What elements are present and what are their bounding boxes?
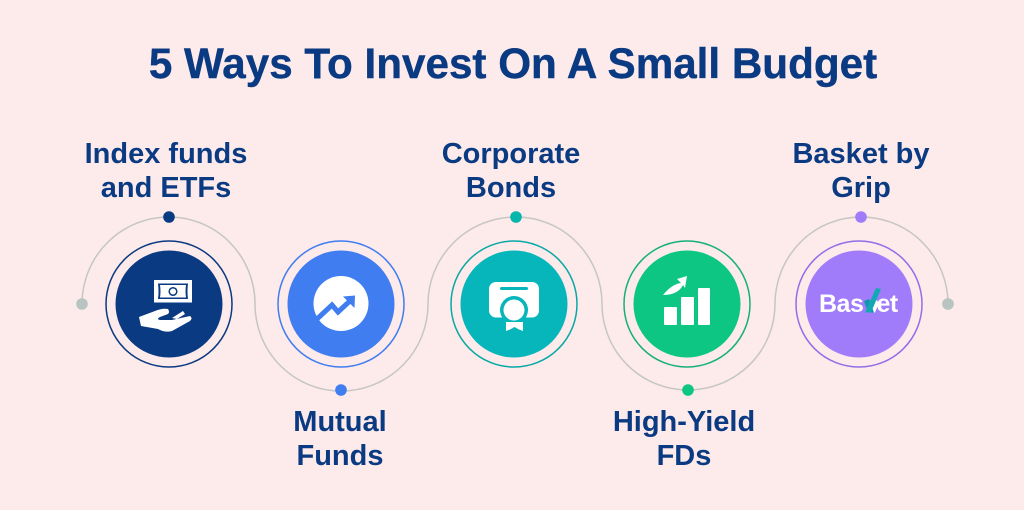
end dot [942,298,954,310]
label: High-Yield FDs [613,406,755,472]
connector line [82,217,948,391]
label: Basket by Grip: Grip [831,172,891,204]
icon: Basket logo: et [876,290,899,318]
icon: hand with banknote [106,241,232,367]
node dot 1 [163,211,175,223]
icon: growth arrow badge [278,241,404,367]
node dot 4 [682,384,694,396]
node dot 2 [335,384,347,396]
label: High-Yield FDs: High-Yield [613,406,755,438]
label: Index funds and ETFs: Index funds [85,138,247,170]
label: High-Yield FDs: FDs [657,440,711,472]
icon: bar chart with arrow [624,241,750,367]
label: Mutual Funds [293,406,387,472]
label: Index funds and ETFs: and ETFs [101,172,231,204]
start dot [76,298,88,310]
title: 5 Ways To Invest On A Small Budget [149,40,877,87]
label: Mutual Funds: Funds [296,440,384,472]
label: Corporate Bonds: Bonds [466,172,556,204]
label: Corporate Bonds [442,138,580,204]
icon: Basket logo [796,241,922,367]
label: Corporate Bonds: Corporate [442,138,580,170]
icon: Basket logo: Bas [819,290,863,318]
label: Mutual Funds: Mutual [293,406,387,438]
icon: certificate [451,241,577,367]
label: Index funds and ETFs [85,138,247,204]
label: Basket by Grip: Basket by [792,138,930,170]
node dot 5 [855,211,867,223]
node dot 3 [510,211,522,223]
label: Basket by Grip [792,138,930,204]
